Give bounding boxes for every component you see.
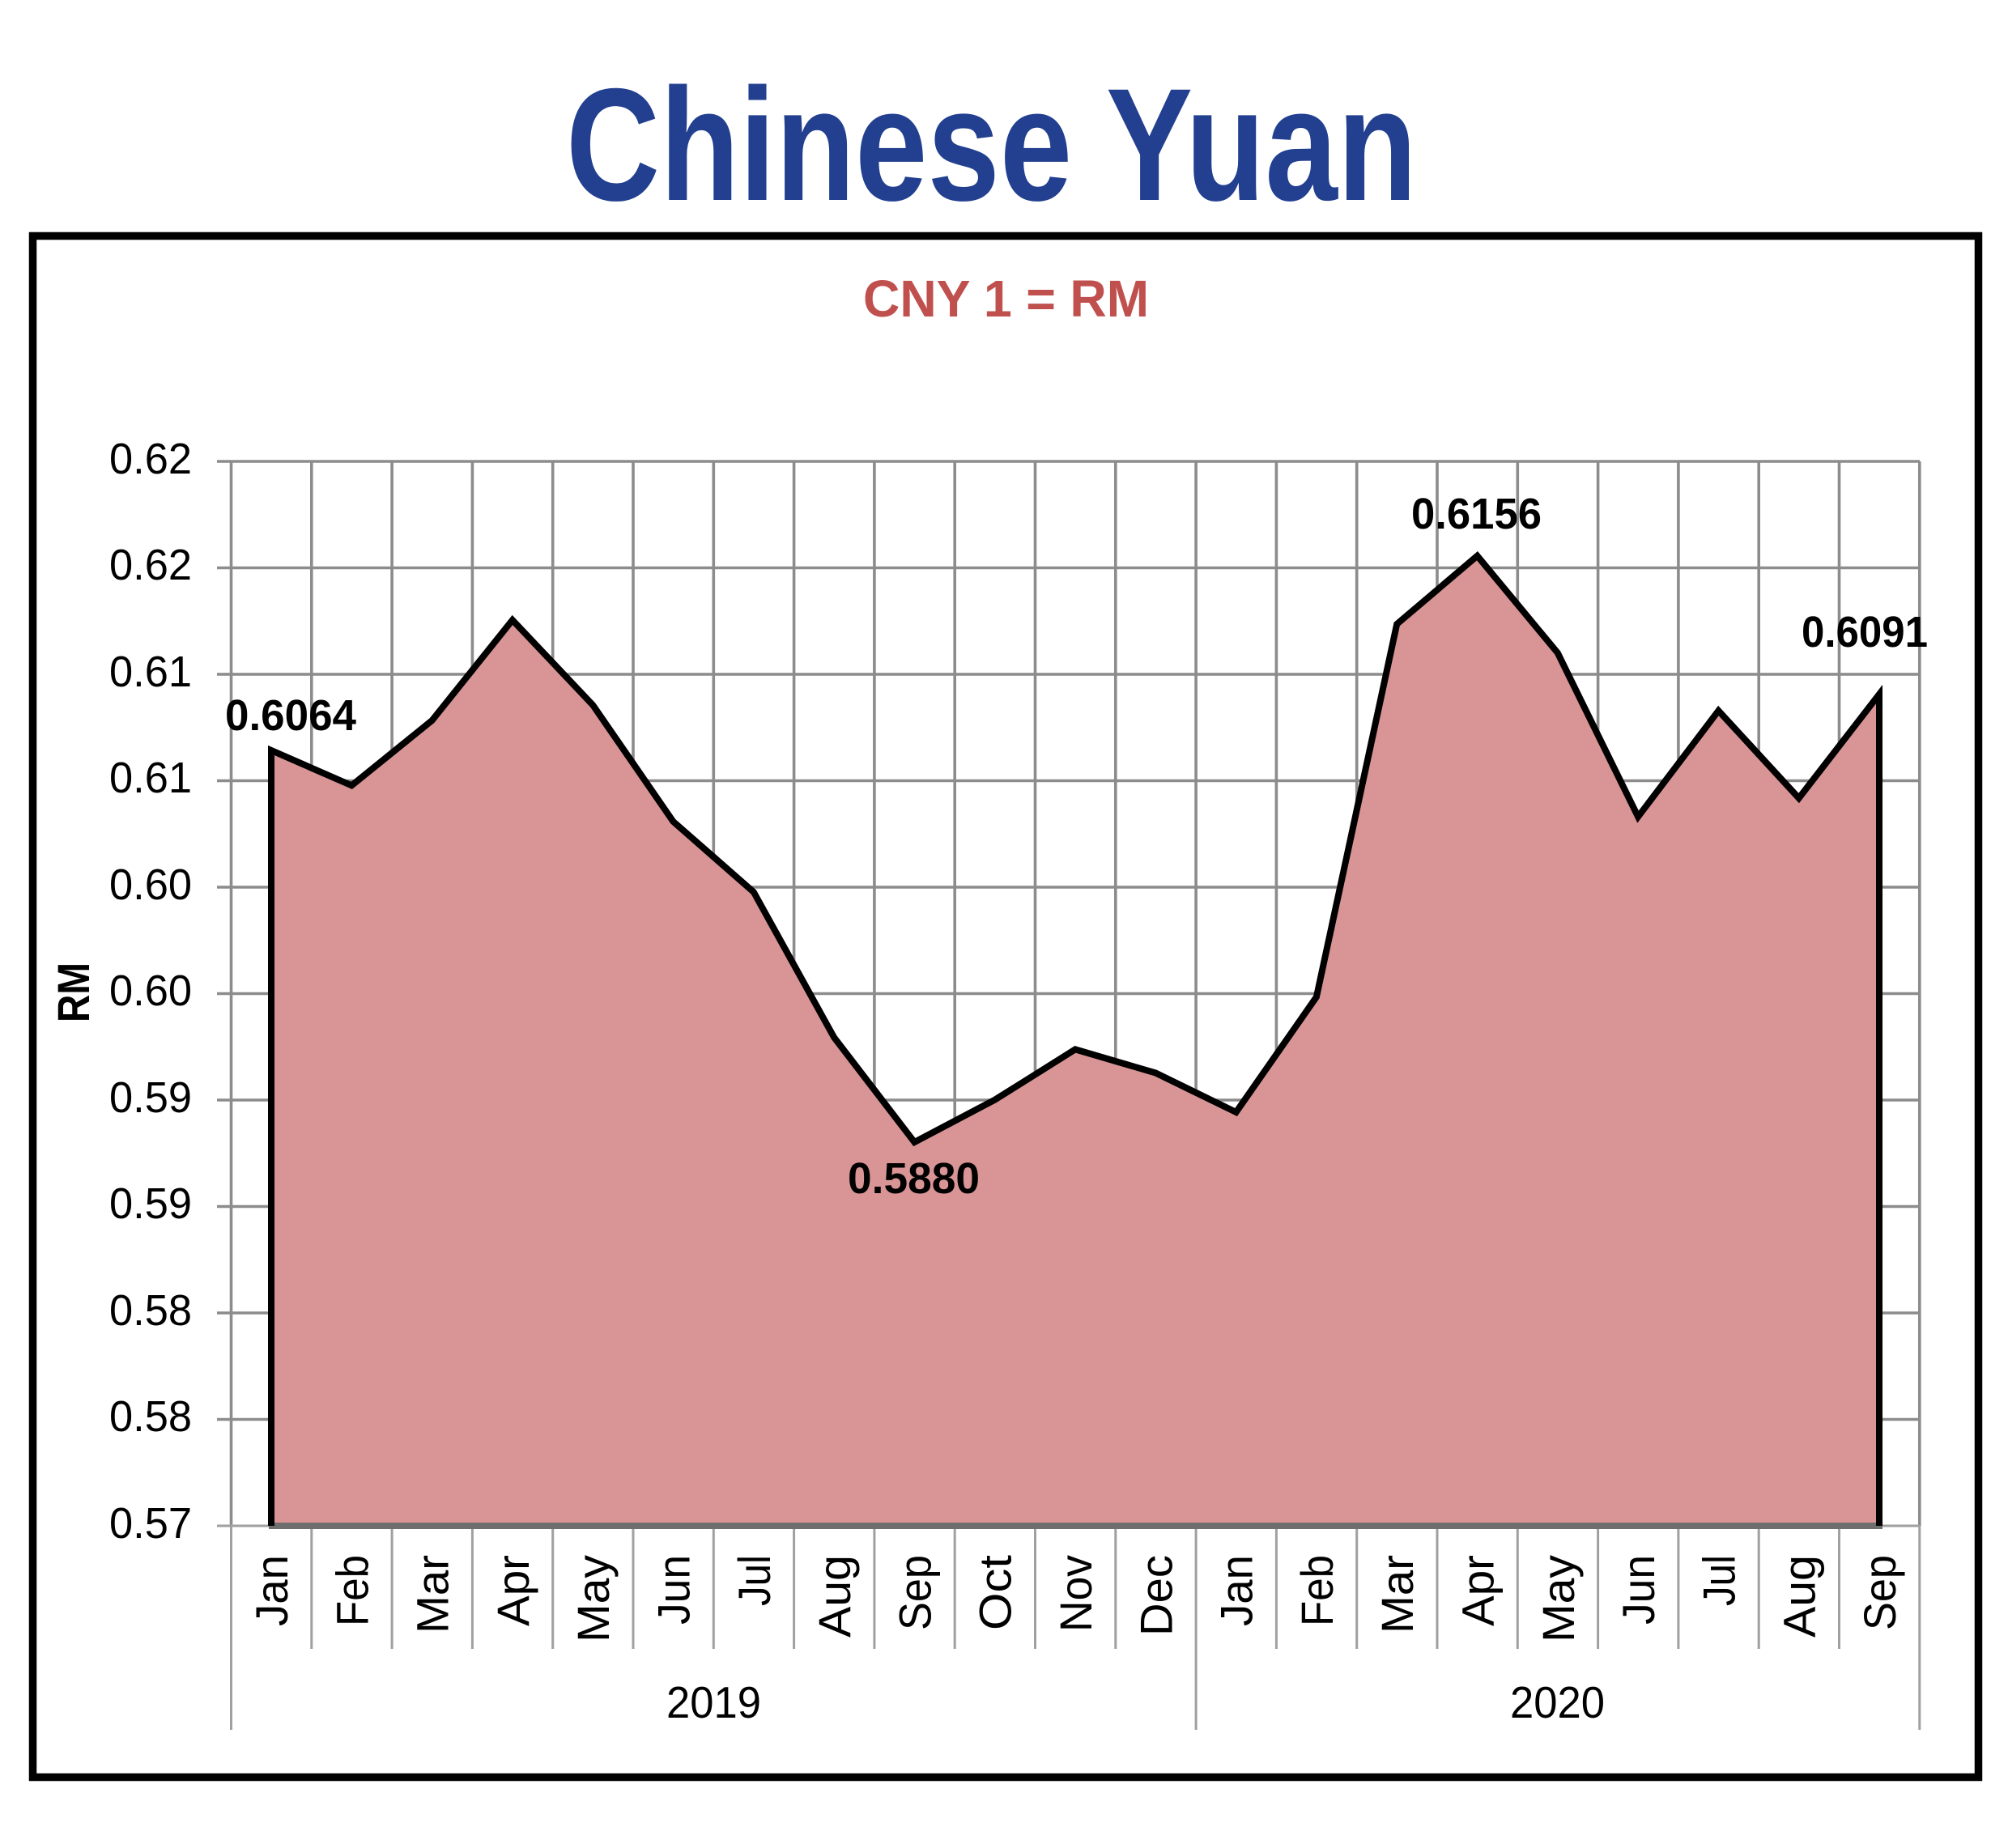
y axis labels: 0.61 — [109, 754, 192, 802]
x axis month labels: May — [1533, 1555, 1584, 1642]
x axis month labels: Sep — [1854, 1555, 1905, 1630]
y axis labels: 0.60 — [109, 860, 192, 909]
y axis labels: 0.60 — [109, 966, 192, 1015]
y axis labels: 0.62 — [109, 541, 192, 589]
y axis labels: 0.59 — [109, 1073, 192, 1122]
x axis month labels: Mar — [407, 1555, 458, 1633]
data label: Sep 2020: 0.6091 — [1802, 608, 1928, 656]
x axis month labels: Aug — [809, 1555, 860, 1638]
x axis month labels — [246, 1555, 1905, 1642]
y axis labels — [109, 435, 192, 1548]
x axis month labels: May — [568, 1555, 619, 1642]
x axis month labels: Aug — [1774, 1555, 1825, 1638]
y axis title: RM — [48, 962, 99, 1022]
x axis month labels: Dec — [1130, 1555, 1181, 1636]
x axis month labels: Jun — [1613, 1555, 1664, 1625]
x axis month labels: Nov — [1050, 1555, 1101, 1632]
x axis month labels: Mar — [1372, 1555, 1423, 1633]
x axis year label: 2019: 2019 — [666, 1677, 761, 1727]
x axis month labels: Jan — [246, 1555, 297, 1626]
title: Chinese Yuan — [566, 55, 1417, 234]
y axis labels: 0.58 — [109, 1392, 192, 1441]
y axis labels: 0.57 — [109, 1499, 192, 1548]
data line — [271, 556, 1879, 1526]
x axis month labels: Sep — [889, 1555, 940, 1630]
y axis labels: 0.62 — [109, 435, 192, 483]
x axis month labels: Feb — [1291, 1555, 1342, 1626]
data label: Jan 2019: 0.6064 — [225, 691, 356, 740]
x axis month labels: Feb — [326, 1555, 377, 1626]
x axis month labels: Oct — [970, 1555, 1021, 1630]
chart subtitle: CNY 1 = RM — [863, 270, 1149, 328]
baseline axis — [269, 1523, 1882, 1529]
data label: Sep 2019: 0.5880 — [848, 1154, 980, 1203]
x axis month labels: Apr — [1453, 1555, 1503, 1626]
data label: Apr 2020: 0.6156 — [1411, 490, 1542, 538]
x axis year label: 2020: 2020 — [1510, 1677, 1605, 1727]
x axis month labels: Apr — [487, 1555, 538, 1626]
area fill — [271, 556, 1879, 1526]
y axis labels: 0.58 — [109, 1286, 192, 1335]
x axis month labels: Jan — [1211, 1555, 1262, 1626]
y axis labels: 0.61 — [109, 648, 192, 696]
chart: area chart of CNY to RM rate — [217, 461, 1920, 1730]
y axis labels: 0.59 — [109, 1179, 192, 1228]
x axis month labels: Jul — [1693, 1555, 1744, 1606]
x axis month labels: Jul — [729, 1555, 780, 1606]
x axis month labels: Jun — [648, 1555, 700, 1625]
